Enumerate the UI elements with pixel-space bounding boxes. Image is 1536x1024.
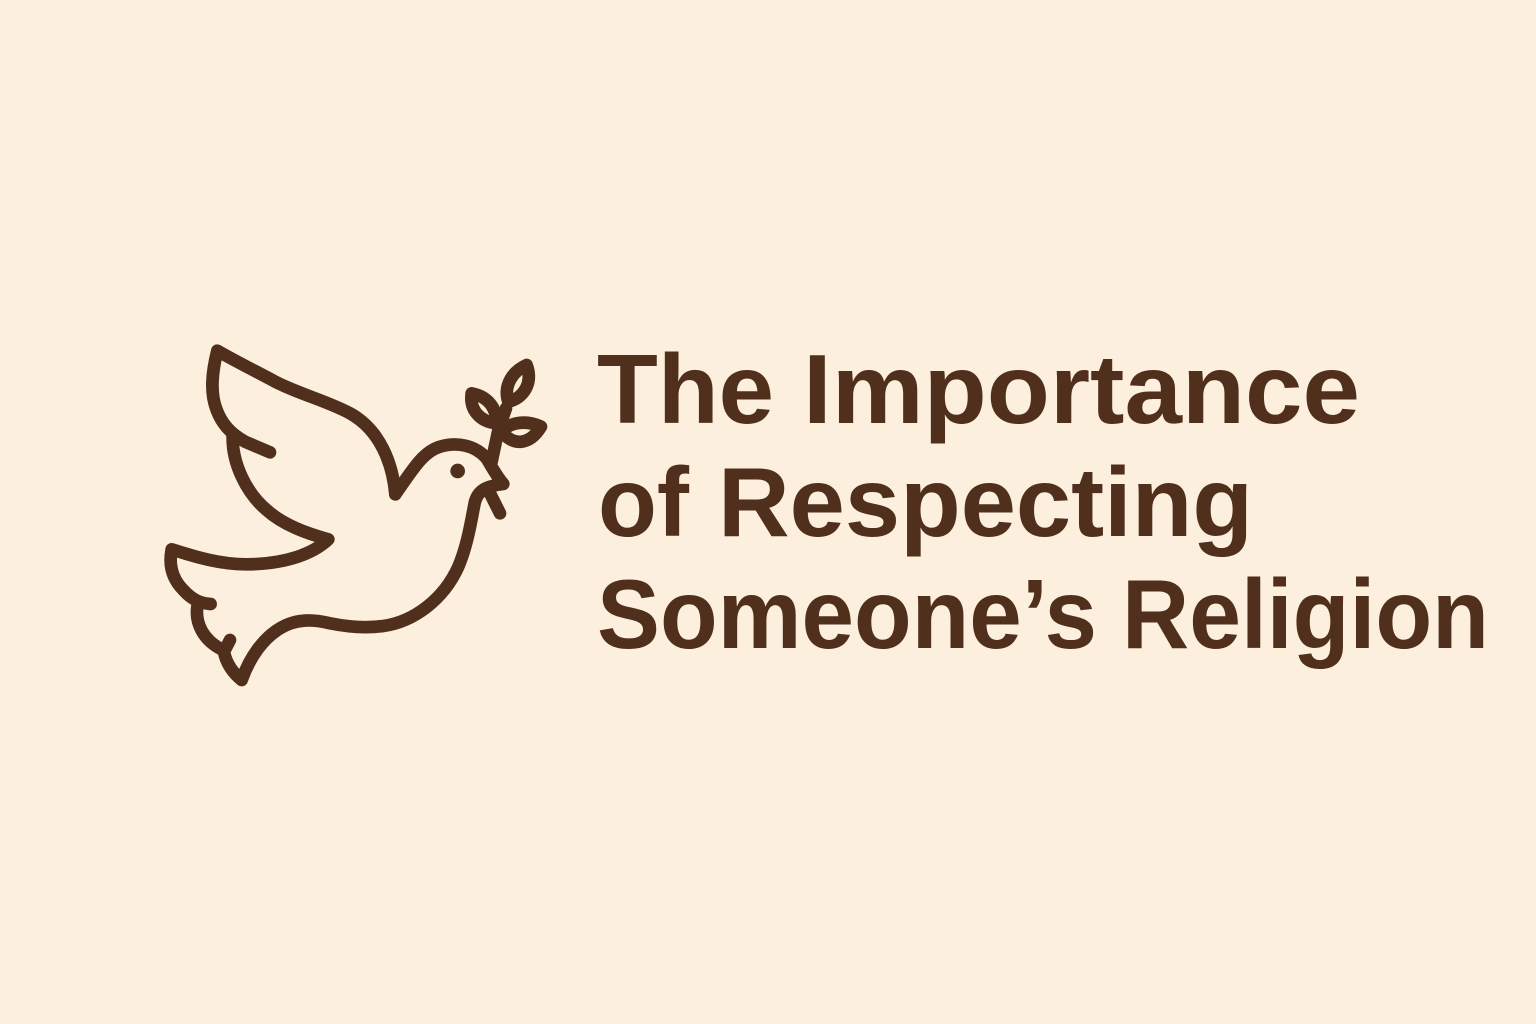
icon: dove with olive branch: [171, 351, 541, 680]
title line 2: of: [598, 447, 689, 557]
title: [597, 334, 1489, 669]
title line 3: Religion: [1122, 559, 1489, 669]
title line 2: Respecting: [718, 447, 1253, 557]
title line 1: [597, 334, 1360, 444]
title line 3: [597, 559, 1489, 669]
title line 1: Importance: [803, 334, 1360, 444]
title line 3: Someone’s: [597, 559, 1097, 669]
title line 1: The: [597, 334, 774, 444]
